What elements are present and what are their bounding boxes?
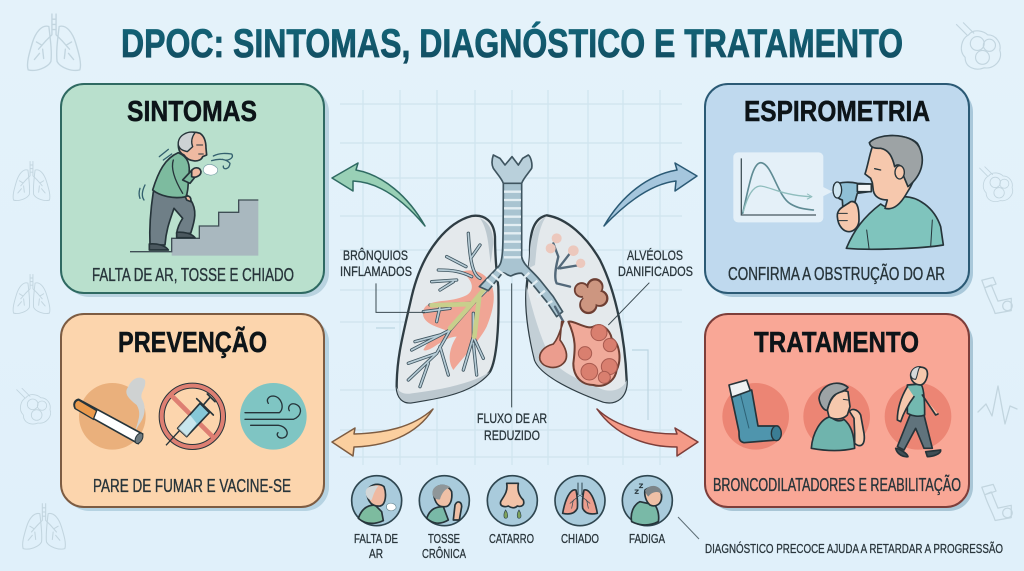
decorative lung icon left lower bbox=[13, 274, 50, 314]
decorative alveoli icon left bbox=[17, 388, 51, 424]
label: brônquios inflamados: BRÔNQUIOS bbox=[343, 248, 408, 263]
chart: spirometry curves bbox=[733, 152, 832, 222]
arrow: to sintomas bbox=[332, 163, 425, 226]
labels: symptom icons: FADIGA bbox=[629, 532, 666, 546]
panel: prevenção bbox=[61, 314, 329, 511]
arrow: to tratamento bbox=[597, 409, 698, 456]
icon: man walking bbox=[885, 367, 951, 457]
panel: sintomas bbox=[61, 84, 329, 297]
arrow: to prevenção bbox=[332, 409, 433, 456]
decorative lung icon bottom left bbox=[23, 504, 65, 549]
icon: catarro bbox=[487, 476, 537, 526]
label: brônquios inflamados: INFLAMADOS bbox=[340, 264, 412, 279]
labels: symptom icons bbox=[354, 532, 666, 561]
leader lines bbox=[376, 283, 649, 407]
panel: espirometria bbox=[705, 84, 973, 297]
decorative lung icon left bbox=[13, 161, 50, 201]
label: brônquios inflamados bbox=[340, 248, 412, 279]
heading: espirometria: ESPIROMETRIA bbox=[744, 96, 930, 128]
labels: symptom icons: CRÔNICA bbox=[422, 546, 466, 561]
icon: cigarette bbox=[74, 378, 146, 450]
icon: tosse crônica bbox=[419, 476, 469, 526]
panel: tratamento bbox=[705, 314, 973, 511]
illustration: man using spirometer bbox=[833, 136, 943, 249]
left lung bbox=[397, 216, 499, 402]
caption: sintomas: FALTA DE AR, TOSSE E CHIADO bbox=[92, 265, 294, 285]
icon: inhaler bbox=[722, 380, 789, 450]
background grid bbox=[340, 90, 682, 465]
icon: falta de ar bbox=[352, 476, 402, 526]
caption: prevenção: PARE DE FUMAR E VACINE-SE bbox=[93, 476, 291, 496]
label: fluxo de ar reduzido: FLUXO DE AR bbox=[477, 411, 547, 426]
labels: symptom icons: AR bbox=[369, 547, 383, 561]
icon: syringe prohibition bbox=[162, 386, 223, 447]
icon: chiado bbox=[555, 476, 605, 526]
label: alvéolos danificados: ALVÉOLOS bbox=[627, 248, 683, 263]
decorative alveoli icon top right bbox=[956, 23, 1001, 69]
trachea bbox=[479, 155, 563, 317]
caption: espirometria: CONFIRMA A OBSTRUÇÃO DO AR bbox=[728, 263, 945, 284]
labels: symptom icons: TOSSE bbox=[428, 532, 460, 546]
right lung bbox=[526, 215, 627, 402]
decorative lung icon top left bbox=[27, 14, 81, 70]
label: alvéolos danificados bbox=[618, 248, 693, 279]
label: fluxo de ar reduzido bbox=[477, 411, 547, 443]
leader line to footer note bbox=[678, 517, 699, 539]
label: fluxo de ar reduzido: REDUZIDO bbox=[484, 428, 540, 443]
damaged alveoli bbox=[540, 233, 619, 386]
icon: fadiga bbox=[622, 476, 672, 526]
inflamed tissue bbox=[423, 270, 494, 370]
central lungs diagram bbox=[376, 155, 649, 407]
icon: man inhaling bbox=[803, 383, 870, 450]
label: alvéolos danificados: DANIFICADOS bbox=[618, 264, 693, 279]
heading: sintomas: SINTOMAS bbox=[127, 96, 257, 128]
heading: tratamento: TRATAMENTO bbox=[754, 327, 919, 359]
illustration: older man climbing stairs short of breath bbox=[130, 132, 258, 256]
icon: clean air bbox=[240, 383, 307, 450]
decorative inhaler icon lower right bbox=[982, 484, 1012, 520]
symptom icons row bbox=[352, 476, 672, 526]
labels: symptom icons: CATARRO bbox=[489, 532, 534, 546]
decorative alveoli icon right bbox=[980, 167, 1013, 202]
left bronchial tree bbox=[408, 233, 487, 387]
labels: symptom icons: CHIADO bbox=[561, 532, 599, 546]
heading: prevenção: PREVENÇÃO bbox=[118, 325, 267, 359]
arrow: to espirometria bbox=[604, 163, 697, 226]
labels: symptom icons: FALTA DE bbox=[354, 532, 398, 546]
decorative ecg trace bbox=[978, 386, 1017, 424]
decorative inhaler icon right bbox=[982, 277, 1012, 314]
